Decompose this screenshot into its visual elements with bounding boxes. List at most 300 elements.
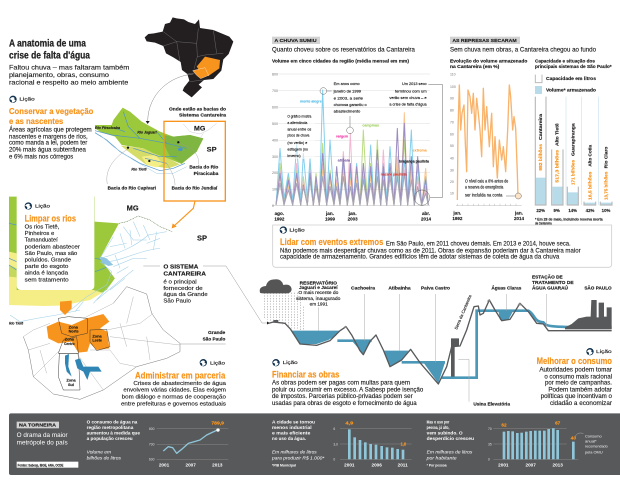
body text: administrar: bom diálogo e normas de cooperação bbox=[122, 394, 226, 400]
chart city labels: monte alegre bbox=[300, 99, 322, 104]
chart subtitle: Volume em cinco cidades da região (média mensal em mm) bbox=[272, 58, 410, 63]
profile labels: SÃO PAULO bbox=[584, 285, 613, 290]
tag bbox=[17, 422, 59, 428]
body text: conservar: como manda a lei, podem ter bbox=[9, 141, 87, 147]
body text: limpar: sem tratamento bbox=[25, 277, 69, 283]
bar chart: reservoir capacity: Alto Tietê bbox=[555, 123, 561, 146]
heading: metrópole do país bbox=[17, 440, 68, 446]
bar chart: per capita consumption bbox=[488, 420, 608, 468]
bar chart: reservoir capacity: 517,3 bilhões bbox=[555, 150, 561, 183]
line chart: stored volume: 70 bbox=[450, 121, 454, 125]
body text: limpar: Tamanduateí bbox=[25, 238, 58, 244]
chart x axis bbox=[452, 210, 524, 221]
body text: conservar: e 6% mais nos córregos bbox=[9, 155, 73, 161]
callout: O Sistema Cantareira: O SISTEMA bbox=[163, 265, 198, 271]
text: uso por pessoa: pessoa, já alto, bbox=[427, 425, 449, 430]
icon: lesson badge bbox=[280, 226, 305, 234]
bar chart: industrial efficiency: 4,9 bbox=[345, 420, 354, 425]
map labels: SP bbox=[207, 147, 217, 154]
callout: alternância: inverno) bbox=[287, 153, 301, 158]
chart x axis: 1992 bbox=[274, 217, 285, 222]
line chart: stored volume: 40 bbox=[450, 156, 454, 160]
chart x axis: 2014 bbox=[421, 217, 431, 222]
line chart: rainfall: 600 bbox=[272, 106, 278, 110]
chart: water profile bbox=[268, 299, 612, 384]
line chart: rainfall: 300 bbox=[272, 155, 278, 159]
body text: limpar: Pinheiros e bbox=[25, 231, 54, 237]
bar chart: industrial efficiency: 2001 bbox=[344, 463, 355, 468]
subtitle: Faltou chuva – mas faltaram também bbox=[9, 64, 130, 71]
line chart: consumption: 2013 bbox=[212, 463, 223, 468]
heading bbox=[17, 433, 68, 446]
callout: nível 8% bbox=[464, 178, 521, 199]
line chart: consumption: 2001 bbox=[159, 463, 170, 468]
bar chart: per capita consumption: 35 bbox=[488, 443, 492, 447]
line chart: rainfall: 500 bbox=[272, 122, 278, 126]
arrow: from Brazil to basin map bbox=[146, 74, 193, 124]
line chart: stored volume: 30 bbox=[450, 168, 454, 172]
line chart: rainfall: 700 bbox=[272, 89, 278, 93]
chart x axis: abr. bbox=[422, 211, 430, 216]
legend: Volume* armazenado bbox=[546, 88, 596, 93]
map: green strip and basin area bbox=[9, 197, 119, 306]
text: uso por pessoa: * Por pessoa bbox=[427, 463, 447, 467]
chart subtitle: volume: Evolução do volume armazenado bbox=[450, 58, 528, 63]
icon: lesson badge bbox=[272, 359, 298, 366]
line chart: consumption bbox=[149, 420, 228, 468]
callout: 2013 seco bbox=[389, 81, 442, 205]
map labels bbox=[95, 107, 227, 191]
callout: 2013 seco: Um 2013 seco bbox=[402, 81, 427, 86]
chart x axis: 1999 bbox=[325, 217, 335, 222]
bar chart: reservoir capacity: 16,5 bilhões bbox=[587, 171, 593, 200]
body text: conservar bbox=[9, 126, 92, 161]
map labels: Grande bbox=[208, 330, 226, 335]
text: indústria bbox=[271, 419, 325, 467]
line chart: stored volume: 90 bbox=[450, 97, 454, 101]
profile labels: RESERVATÓRIO bbox=[300, 280, 338, 285]
icon: Brazil map bbox=[145, 17, 233, 97]
chart city labels: atibaia bbox=[338, 157, 351, 162]
line chart: consumption: 600 bbox=[149, 458, 155, 462]
callout: anos chuvosos: chuvosa garantiu o bbox=[334, 102, 367, 107]
heading: Sem chuva nem obras, a Cantareira chegou ao fundo bbox=[450, 48, 597, 54]
callout: alternância: anual entre os bbox=[287, 127, 311, 132]
body text: financiar: poluir ou consumir em excesso. A Sabesp pede isenção bbox=[272, 387, 424, 393]
bar chart: per capita consumption: 2007 bbox=[525, 463, 536, 468]
text: uso por pessoa: Mas o uso por bbox=[427, 419, 450, 424]
bar chart: per capita consumption: 70 bbox=[488, 427, 492, 431]
line chart: consumption: 2007 bbox=[185, 463, 196, 468]
line chart: rainfall: 400 bbox=[272, 139, 278, 143]
text: consumo: aumentou à medida que bbox=[87, 430, 141, 435]
map labels: SP bbox=[197, 233, 207, 242]
profile labels: Jaguari e Jacareí bbox=[299, 285, 339, 290]
bar chart: reservoir capacity: Guarapiranga bbox=[570, 123, 576, 156]
icon: rain cloud bbox=[260, 279, 304, 330]
bar chart: reservoir capacity: 14% bbox=[568, 208, 577, 213]
bar chart: per capita consumption: 62 bbox=[501, 423, 507, 428]
line chart: rainfall: 100 bbox=[272, 188, 278, 192]
map labels: Bacia do Rio bbox=[189, 164, 219, 169]
body text: financiar: de impostos. Parcerias público-privadas podem ser bbox=[272, 394, 413, 400]
icon: lesson badge bbox=[586, 348, 612, 355]
bar chart: per capita consumption: anual* bbox=[585, 439, 597, 443]
bar chart: per capita consumption: recomendado bbox=[585, 445, 608, 449]
callout: anos chuvosos bbox=[320, 81, 367, 134]
profile labels: sistema, inaugurado bbox=[296, 296, 341, 301]
text: consumo bbox=[87, 419, 141, 461]
body text: lidar: Não podemos mais desperdiçar chuvas como as de 2011. Obras de expansão poderiam dar à Cantareira maior bbox=[280, 248, 581, 254]
body text: limpar: São Paulo, mas são bbox=[25, 251, 77, 257]
chart subtitle: volume: na Cantareira (em %) bbox=[450, 64, 500, 69]
map labels: Zona bbox=[66, 379, 76, 383]
line chart: stored volume: 110 bbox=[450, 73, 456, 77]
callout: O Sistema Cantareira bbox=[143, 265, 208, 305]
text: uso por pessoa: vem subindo. O bbox=[427, 430, 463, 435]
map labels: MG bbox=[127, 204, 139, 213]
map labels: Sistema Cantareira bbox=[179, 113, 227, 118]
chart city labels: campinas bbox=[362, 122, 380, 127]
bar chart: industrial efficiency: 1,8 bbox=[401, 442, 406, 447]
icon: lesson badge: Lição bbox=[210, 360, 225, 366]
chart city labels: nazaré paulista bbox=[381, 172, 407, 177]
map labels: Centro bbox=[64, 342, 75, 346]
pipes bbox=[337, 311, 612, 378]
bar chart: reservoir capacity: Cantareira bbox=[538, 114, 544, 140]
tag: AS REPRESAS SECARAM bbox=[452, 38, 517, 43]
subtitle: racional e respeito ao meio ambiente bbox=[9, 80, 129, 87]
terrain line bbox=[268, 300, 612, 384]
bar chart: industrial efficiency: 0 bbox=[333, 458, 335, 462]
heading: administrar: Administrar em parceria bbox=[135, 370, 226, 380]
chart subtitle: capacity: Capacidade e situação dos bbox=[535, 58, 596, 63]
map labels: Rio Jaguari bbox=[137, 130, 158, 134]
profile labels: ESTAÇÃO DE bbox=[532, 274, 563, 279]
city skyline bbox=[565, 300, 612, 329]
callout: alternância bbox=[287, 114, 315, 159]
line chart: consumption: 700 bbox=[149, 443, 155, 447]
bar chart: reservoir capacity bbox=[535, 97, 612, 213]
callout: 2013 seco: verão sem chuva – e bbox=[389, 95, 427, 100]
profile labels: Usina Elevatória bbox=[473, 401, 511, 406]
line chart: rainfall bbox=[272, 72, 430, 208]
bar chart: reservoir capacity: 982 bilhões bbox=[538, 144, 544, 171]
callout: alternância: a alternância bbox=[287, 120, 308, 125]
body text: administrar: entre prefeituras e governos estaduais bbox=[121, 401, 226, 407]
subtitle: planejamento, obras, consumo bbox=[9, 72, 109, 79]
chart subtitle: volume bbox=[450, 58, 528, 69]
chart x axis: 2003 bbox=[348, 217, 358, 222]
body text: melhorar: Podem também adotar bbox=[548, 387, 612, 393]
tag bbox=[450, 37, 520, 44]
source: Fontes: Sabesp, IBGE, ANA, OCDE bbox=[18, 463, 63, 467]
callout: nível 8%: O nível caiu a 8% antes de bbox=[465, 179, 509, 184]
bar chart: per capita consumption: 67 bbox=[555, 420, 561, 425]
chart subtitle: capacity: principais sistemas de São Paulo* bbox=[535, 64, 612, 69]
heading: financiar: Financiar as obras bbox=[272, 370, 339, 380]
tag: NA TORNEIRA bbox=[19, 423, 57, 428]
bar chart: per capita consumption: 2013 bbox=[552, 463, 563, 468]
heading: conservar: Conservar a vegetação bbox=[9, 106, 93, 116]
legend: Capacidade em litros bbox=[546, 76, 597, 81]
profile labels: Serra da Cantareira bbox=[453, 293, 473, 330]
footnote: * Em 28 de maio, incluindo reserva morta bbox=[535, 218, 604, 222]
callout: anos chuvosos: abastecimento bbox=[334, 109, 361, 114]
chart city labels: extrema bbox=[413, 148, 427, 153]
bar chart: per capita consumption: 0 bbox=[488, 458, 490, 462]
body text: melhorar bbox=[539, 368, 613, 407]
heading: limpar: Limpar os rios bbox=[25, 214, 76, 224]
chart x axis: jan. bbox=[514, 210, 523, 215]
panel: As represas secaram bbox=[450, 37, 612, 226]
title: A anatomia de uma bbox=[9, 39, 86, 50]
callout: O Sistema Cantareira: CANTAREIRA bbox=[163, 272, 206, 278]
line chart: rainfall: 0 bbox=[272, 204, 274, 208]
bar chart: per capita consumption: pela OMU bbox=[585, 450, 603, 454]
line chart: stored volume: 100 bbox=[450, 85, 456, 89]
map labels: Zona bbox=[69, 325, 78, 329]
map labels: MG bbox=[194, 126, 205, 133]
bar chart: reservoir capacity: 13,75 bilhões bbox=[604, 171, 610, 200]
callout: anos chuvosos: Em anos como bbox=[334, 81, 360, 86]
tag: A CHUVA SUMIU bbox=[274, 38, 317, 43]
pumping tower bbox=[451, 338, 459, 377]
callout: O Sistema Cantareira: é o principal bbox=[163, 279, 197, 285]
map labels: Norte bbox=[69, 330, 79, 334]
line chart: stored volume: 50 bbox=[450, 144, 454, 148]
map labels: Rio Piracicaba bbox=[95, 126, 120, 130]
chart x axis: 1992 bbox=[452, 216, 463, 221]
heading: lidar: Lidar com eventos extremos bbox=[280, 237, 383, 247]
body text: conservar: nascentes e margens de rios, bbox=[9, 134, 88, 140]
legend bbox=[535, 75, 597, 94]
panel: Na torneira dark band bbox=[9, 413, 620, 475]
line chart: consumption: 800 bbox=[149, 427, 155, 431]
map labels: Leste bbox=[92, 339, 102, 343]
map labels: Piracicaba bbox=[194, 171, 219, 176]
map labels: Zona bbox=[92, 335, 102, 339]
callout: alternância: O gráfico mostra bbox=[287, 114, 312, 119]
icon: lesson badge bbox=[9, 96, 35, 103]
bar chart: per capita consumption: 40 bbox=[571, 435, 576, 440]
arrow: leader from Sistema Cantareira to reservoir profile bbox=[203, 266, 270, 324]
line chart: rainfall: 200 bbox=[272, 171, 278, 175]
heading: Quanto choveu sobre os reservatórios da Cantareira bbox=[272, 48, 416, 54]
body text: financiar: usadas para obras de esgoto e fornecimento de água bbox=[272, 401, 417, 407]
map labels: Rio Tietê bbox=[131, 168, 147, 172]
body text: limpar: parte do esgoto bbox=[25, 264, 68, 270]
body text: melhorar: Autoridades podem tomar bbox=[539, 368, 612, 374]
chart city labels: bragança paulista bbox=[399, 159, 430, 164]
heading: conservar bbox=[9, 106, 93, 126]
bar chart: reservoir capacity: 22% bbox=[536, 208, 545, 213]
text: indústria: para produzir R$ 1.000* bbox=[271, 455, 325, 460]
tag bbox=[272, 37, 320, 44]
map labels: Sul bbox=[68, 383, 74, 387]
panel: introduction and vegetation map bbox=[9, 17, 233, 201]
text: uso por pessoa: desperdício cresceu bbox=[427, 436, 474, 441]
bar chart: reservoir capacity: Rio Claro bbox=[604, 147, 610, 168]
map: urban area in orange bbox=[47, 301, 110, 390]
profile labels: TRATAMENTO DE bbox=[532, 280, 574, 285]
callout: nível 8%: ser incluída na conta bbox=[465, 193, 503, 198]
chart city labels: vargem bbox=[336, 134, 348, 139]
profile labels bbox=[296, 274, 613, 406]
body text: lidar: Em São Paulo, em 2011 choveu demais. Em 2013 e 2014, houve seca. bbox=[386, 241, 571, 247]
body text: limpar: ainda é lançada bbox=[25, 271, 69, 277]
card: Limpar os rios bbox=[17, 193, 94, 290]
map: southern reservoirs bbox=[65, 354, 102, 380]
callout: alternância: (no verão) e bbox=[287, 140, 308, 145]
callout: alternância: estiagem (no bbox=[287, 146, 309, 151]
title: crise de falta d'água bbox=[9, 51, 90, 62]
text: consumo: O consumo de água na bbox=[87, 419, 138, 424]
callout: O Sistema Cantareira: água da Grande bbox=[163, 292, 208, 298]
icon: lesson badge: Lição bbox=[19, 97, 35, 103]
map: Grande São Paulo municipal outline bbox=[23, 287, 180, 399]
text: indústria: A cidade se tornou bbox=[272, 419, 315, 424]
callout: O Sistema Cantareira: fornecedor de bbox=[163, 286, 203, 292]
bar chart: industrial efficiency: 2006 bbox=[371, 463, 382, 468]
profile labels: Águas Claras bbox=[491, 285, 522, 290]
body text: financiar: As obras podem ser pagas com multas para quem bbox=[272, 381, 410, 387]
bar chart: per capita consumption: Consumo bbox=[585, 434, 602, 438]
icon: lesson badge: Lição bbox=[283, 360, 298, 366]
bar chart: industrial efficiency: 3,0 bbox=[333, 443, 338, 447]
line chart: stored volume: 60 bbox=[450, 132, 454, 136]
map labels: Rio Tietê bbox=[9, 322, 23, 326]
text: indústria: e mais eficiente bbox=[272, 430, 311, 435]
line chart: rainfall: 800 bbox=[272, 72, 278, 76]
bar chart: per capita consumption: 2001 bbox=[498, 463, 509, 468]
body text: lidar: capacidade de armazenamento. Grandes edifícios têm de adotar sistemas de coleta de água da chuva bbox=[280, 255, 560, 261]
chart x axis: ago. bbox=[275, 211, 284, 216]
text: consumo: bilhões de litros bbox=[87, 456, 122, 461]
body text: melhorar: cidadão a economizar bbox=[550, 401, 612, 407]
body text: limpar: poluídos. Grande bbox=[25, 257, 71, 263]
callout: 2013 seco: terminou com um bbox=[395, 88, 427, 93]
icon: lesson badge: Lição bbox=[596, 349, 612, 355]
chart city labels bbox=[300, 99, 430, 177]
body text: administrar: Crises de abastecimento de água bbox=[133, 381, 227, 387]
card: Lidar com eventos extremos bbox=[273, 225, 612, 267]
band background bbox=[9, 413, 620, 475]
body text: administrar bbox=[121, 381, 227, 407]
map labels: Zona bbox=[65, 338, 74, 342]
text: consumo: a população cresceu bbox=[87, 436, 133, 441]
callout: 2013 seco: a crise de falta d'água bbox=[389, 102, 427, 107]
reservoir water bbox=[291, 311, 513, 383]
bar chart: reservoir capacity: 42% bbox=[586, 208, 594, 213]
text: indústria: menos industrial bbox=[272, 425, 312, 430]
callout: nível 8%: a reserva de emergência bbox=[465, 185, 504, 190]
body text: conservar: 20% mais água subterrânea bbox=[9, 148, 87, 154]
bar chart: reservoir capacity: 171 bilhões bbox=[570, 160, 576, 185]
bar chart: industrial efficiency: 2011 bbox=[398, 463, 408, 468]
callout leader: Grande São Paulo bbox=[180, 343, 226, 345]
chart x axis: jan. bbox=[452, 210, 461, 215]
panel: Sistema Cantareira detailed map bbox=[9, 193, 227, 407]
profile labels: O mais recente do bbox=[298, 290, 339, 295]
text: indústria: Em milhares de litros bbox=[272, 449, 318, 454]
map labels: Onde estão as bacias do bbox=[169, 107, 226, 112]
profile labels: Paiva Castro bbox=[421, 285, 451, 290]
bar chart: industrial efficiency bbox=[333, 420, 412, 468]
line chart: stored volume: 20 bbox=[450, 180, 454, 184]
body text: lidar bbox=[280, 241, 581, 261]
footnote bbox=[535, 218, 604, 226]
map: Cantareira basin outline with rivers bbox=[10, 216, 172, 322]
map frame: Cantareira zoom box bbox=[164, 121, 225, 201]
callout: anos chuvosos: janeiro de 1999 bbox=[333, 88, 362, 93]
text: uso por pessoa: por habitante bbox=[425, 455, 457, 460]
map labels: São Paulo bbox=[203, 337, 226, 342]
chart x axis: 2014 bbox=[514, 216, 524, 221]
subtitle bbox=[9, 64, 130, 87]
text: indústria: *PIB Municipal bbox=[272, 463, 296, 467]
title bbox=[9, 39, 90, 62]
body text: administrar: envolvem várias cidades. Elas exigem bbox=[123, 387, 226, 393]
text: consumo: região metropolitana bbox=[87, 425, 134, 430]
bar chart: reservoir capacity: 9% bbox=[554, 208, 560, 213]
body text: limpar: poderiam abastecer bbox=[25, 244, 80, 250]
line chart: stored volume: 10 bbox=[450, 192, 454, 196]
callout: O Sistema Cantareira: São Paulo bbox=[163, 299, 191, 305]
profile labels: Atibainha bbox=[388, 285, 411, 290]
heading: conservar: e as nascentes bbox=[9, 116, 63, 126]
text: uso por pessoa: Em milhares de litros bbox=[427, 449, 473, 454]
bar chart: industrial efficiency: 6 bbox=[333, 427, 335, 431]
map: upper basins bbox=[95, 108, 217, 185]
profile labels: ÁGUA GUARAÚ bbox=[532, 285, 568, 290]
profile labels: em 1991 bbox=[310, 302, 328, 307]
map labels bbox=[9, 204, 226, 387]
line chart: consumption: 789,9 bbox=[211, 420, 224, 425]
line chart: stored volume bbox=[450, 73, 522, 206]
panel: A chuva sumiu bbox=[272, 37, 442, 222]
text: consumo: Volume em bbox=[87, 449, 111, 454]
profile labels: Cachoeira bbox=[351, 285, 376, 290]
body text: conservar: Áreas agrícolas que protegem bbox=[9, 126, 92, 133]
line chart: stored volume: 80 bbox=[450, 109, 454, 113]
icon: lesson badge bbox=[200, 359, 225, 366]
body text: melhorar: o consumo mais racional bbox=[544, 374, 612, 380]
callout: alternância: picos de chuva bbox=[287, 133, 310, 138]
body text: limpar bbox=[25, 224, 80, 283]
chart subtitle: capacity bbox=[535, 58, 612, 69]
callout: anos chuvosos: e 2003, a serie bbox=[334, 95, 364, 100]
icon: lesson badge: Lição bbox=[35, 203, 50, 209]
body text: limpar: Os rios Tietê, bbox=[25, 224, 60, 230]
arrow: orange frame to detail map bbox=[172, 201, 195, 228]
map labels: Bacia do Rio Capivari bbox=[108, 186, 156, 191]
panel: reservoir profile and lessons bbox=[260, 225, 613, 407]
footnote: da Cantareira bbox=[535, 222, 552, 226]
panel: bottom band charts bbox=[333, 419, 608, 468]
chart x axis bbox=[274, 211, 431, 222]
icon: lesson badge: Lição bbox=[289, 228, 305, 234]
bar chart: reservoir capacity: Alto Cotia bbox=[587, 145, 593, 167]
text: indústria: no uso da água. bbox=[272, 436, 306, 441]
body text: financiar bbox=[272, 381, 424, 407]
chart x axis: jan. bbox=[325, 211, 334, 216]
heading: O drama da maior bbox=[17, 433, 68, 439]
bar chart: reservoir capacity: 10% bbox=[602, 208, 610, 213]
source bbox=[17, 462, 78, 468]
body text: melhorar: por meio de campanhas. bbox=[545, 381, 612, 387]
body text: melhorar: políticas que incentivam o bbox=[541, 394, 613, 400]
